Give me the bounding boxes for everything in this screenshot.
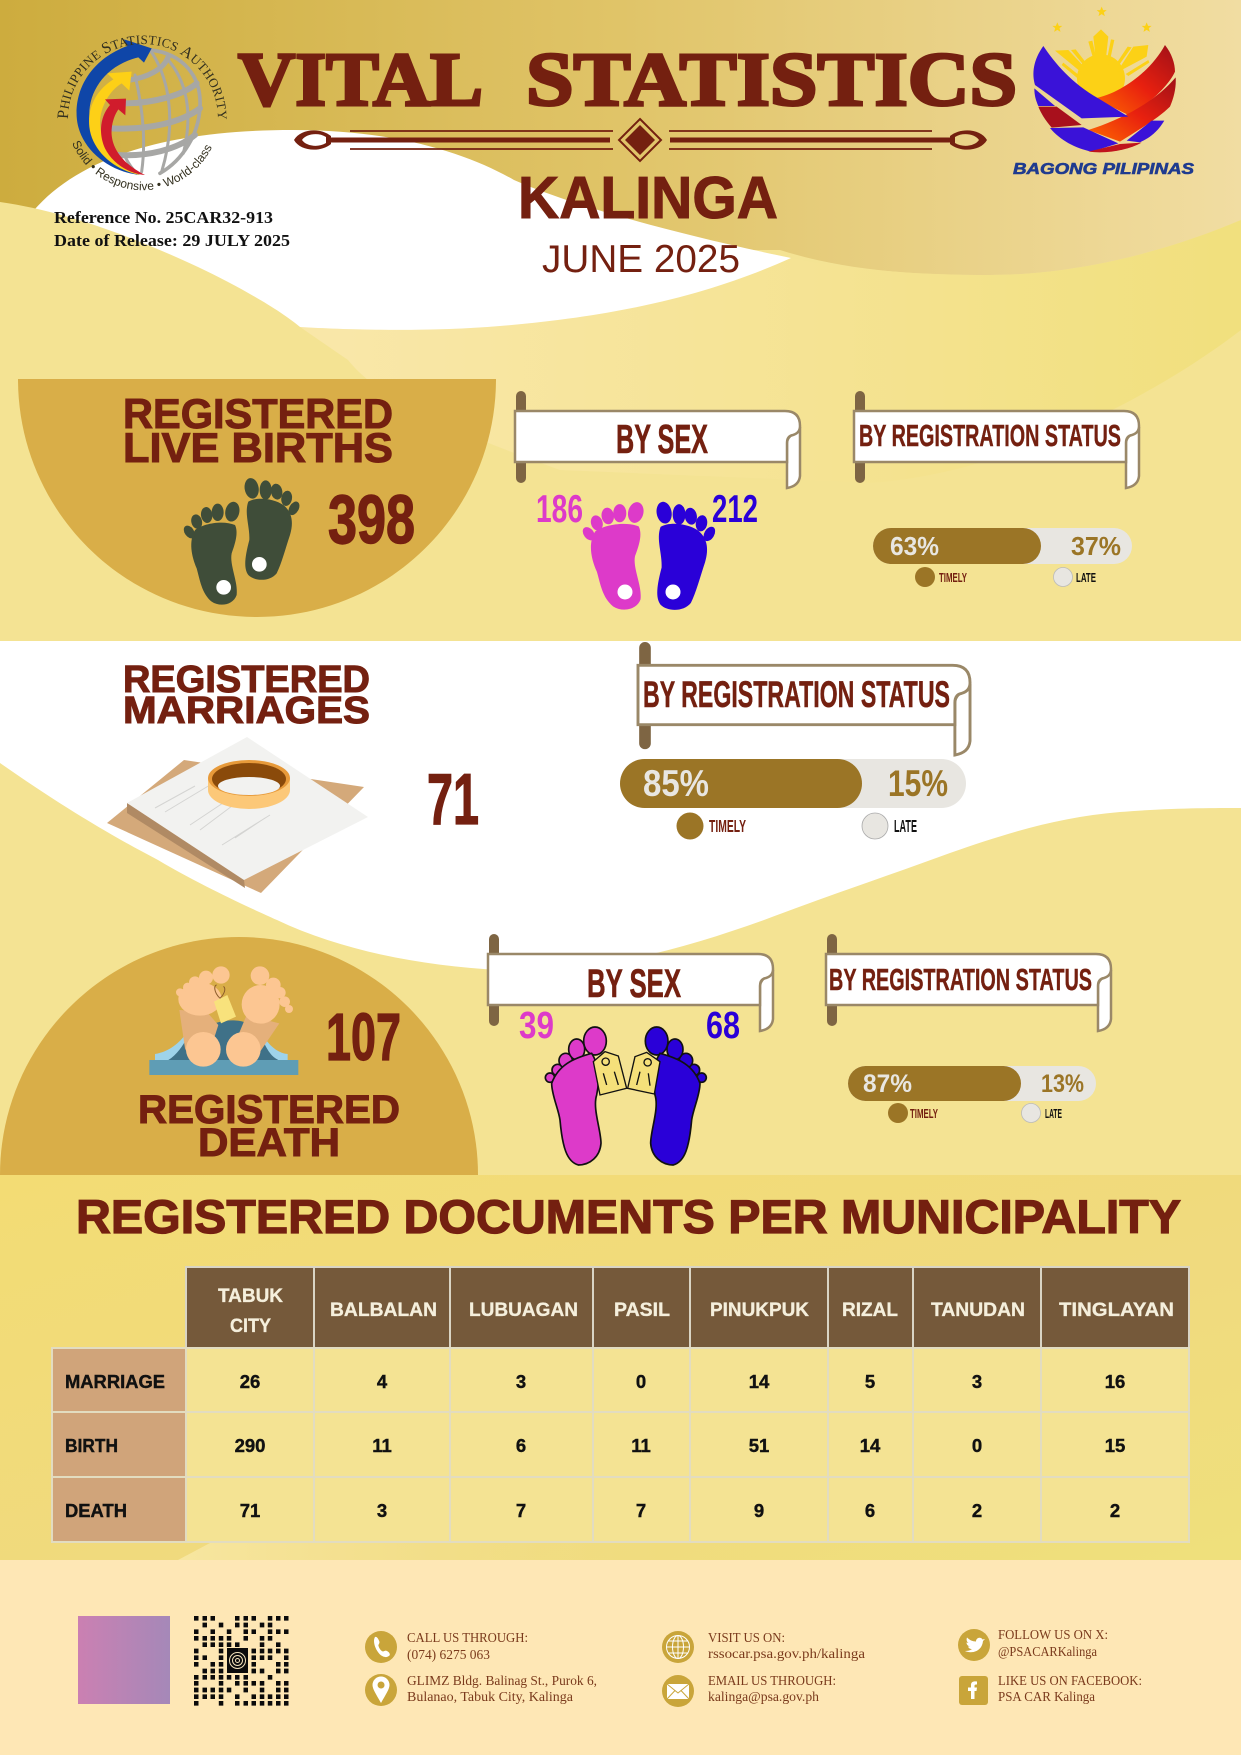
icon: facebook <box>959 1676 988 1705</box>
contact: email <box>708 1674 836 1705</box>
total: 398 <box>328 481 415 558</box>
contact: X account: FOLLOW US ON X: <box>998 1628 1108 1643</box>
table section background <box>0 1175 1241 1560</box>
progress bar: 63% <box>890 533 939 561</box>
title: STATISTICS <box>526 38 1017 122</box>
reference text: Date of Release: 29 JULY 2025 <box>54 231 290 250</box>
panel: registered death <box>0 937 478 1175</box>
banner label: BY REGISTRATION STATUS <box>643 674 950 715</box>
globe <box>112 50 200 173</box>
section heading: registered documents per municipality: REGISTERED DOCUMENTS PER MUNICIPALITY <box>76 1190 1181 1243</box>
banner <box>515 391 800 488</box>
legend: LATE <box>894 816 917 836</box>
title ornament <box>294 119 987 161</box>
progress bar <box>848 1066 1096 1101</box>
row: marriage: 26 <box>240 1371 260 1392</box>
reference text: Reference No. 25CAR32-913 <box>54 208 273 227</box>
banner label: BY SEX <box>616 416 708 462</box>
panel: marriages by registration status <box>620 642 970 840</box>
icon: phone <box>365 1631 397 1663</box>
icon: female foot <box>580 501 646 610</box>
table row label cells <box>52 1348 186 1542</box>
contact: facebook: PSA CAR Kalinga <box>998 1690 1096 1705</box>
panel: deaths by registration status <box>826 934 1111 1123</box>
row: birth: 14 <box>860 1435 881 1456</box>
gold dome <box>0 937 478 1175</box>
progress bar: 13% <box>1041 1070 1084 1098</box>
logo ring title: PHILIPPINE STATISTICS AUTHORITY <box>57 36 227 120</box>
red bands <box>1095 45 1175 115</box>
contact: address <box>407 1674 597 1705</box>
legend: LATE <box>1076 571 1096 585</box>
total: 107 <box>326 1000 401 1075</box>
progress bar: 87% <box>863 1070 912 1098</box>
sun <box>1055 29 1149 102</box>
legend: TIMELY <box>910 1107 938 1121</box>
panel: registered marriages <box>107 659 479 893</box>
lower yellow wave <box>0 763 1241 1175</box>
progress bar: 85% <box>643 763 709 804</box>
contact: phone: (074) 6275 063 <box>407 1648 490 1663</box>
municipality names: CITY <box>230 1316 271 1337</box>
row: marriage: 4 <box>377 1371 388 1392</box>
row: death <box>65 1500 1120 1521</box>
legend: TIMELY <box>709 816 746 836</box>
municipality names: PASIL <box>614 1300 670 1321</box>
municipality names: TANUDAN <box>931 1300 1025 1321</box>
row: marriage: MARRIAGE <box>65 1371 165 1392</box>
table section lower light band <box>178 1543 1241 1560</box>
logo ring motto: Solid • Responsive • World-class <box>73 140 212 190</box>
contact: phone <box>407 1631 528 1663</box>
municipality names: PINUKPUK <box>710 1300 809 1321</box>
stars <box>1052 7 1152 32</box>
row: marriage: 16 <box>1105 1371 1125 1392</box>
row: birth: 6 <box>516 1435 526 1456</box>
table header cells <box>186 1267 1189 1348</box>
row: marriage: 14 <box>749 1371 770 1392</box>
panel: deaths by sex <box>488 934 773 1165</box>
heading: REGISTERED <box>123 659 370 701</box>
PSA logo <box>57 36 227 190</box>
row: death: 6 <box>865 1500 875 1521</box>
banner label: BY SEX <box>587 962 681 1006</box>
row: death: 3 <box>377 1500 387 1521</box>
reference text <box>54 208 290 250</box>
row: marriage: 3 <box>972 1371 982 1392</box>
male count: 212 <box>712 488 758 531</box>
banner label: BY REGISTRATION STATUS <box>829 963 1092 997</box>
row: birth: 15 <box>1105 1435 1125 1456</box>
progress bar: 37% <box>1071 533 1121 561</box>
heading: REGISTERED <box>123 390 393 437</box>
row: marriage: 5 <box>865 1371 875 1392</box>
header gold wave <box>0 0 1241 275</box>
icon: ring on documents <box>107 737 368 893</box>
contact: phone: CALL US THROUGH: <box>407 1631 528 1646</box>
heading <box>123 390 393 471</box>
municipality names: LUBUAGAN <box>469 1300 578 1321</box>
contact: facebook: LIKE US ON FACEBOOK: <box>998 1674 1142 1689</box>
heading: DEATH <box>198 1121 340 1165</box>
municipality names: RIZAL <box>842 1300 898 1321</box>
row: marriage: 0 <box>636 1371 646 1392</box>
pink placeholder block <box>78 1616 170 1704</box>
row: death: DEATH <box>65 1500 127 1521</box>
panel: births by registration status <box>854 391 1139 587</box>
title: VITAL <box>238 38 483 122</box>
province heading: KALINGA <box>518 165 778 231</box>
row: marriage <box>65 1371 1125 1392</box>
municipality names <box>218 1286 1174 1337</box>
table body cells <box>186 1348 1189 1542</box>
row: birth: 11 <box>631 1435 651 1456</box>
banner <box>488 934 773 1031</box>
title <box>238 38 1017 122</box>
progress bar <box>620 759 966 808</box>
female count: 39 <box>519 1005 554 1047</box>
total: 71 <box>427 760 479 840</box>
Bagong Pilipinas logo <box>1013 7 1195 178</box>
contact: email: EMAIL US THROUGH: <box>708 1674 836 1689</box>
icon: male foot <box>655 501 718 610</box>
heading <box>123 659 370 732</box>
row: death: 7 <box>636 1500 646 1521</box>
panel: births by sex <box>515 391 800 610</box>
legend <box>888 1103 1062 1123</box>
icon: location pin <box>365 1674 397 1706</box>
contact: website: VISIT US ON: <box>708 1631 785 1646</box>
contact: X account <box>998 1628 1108 1660</box>
row: death: 2 <box>972 1500 982 1521</box>
municipality names: TINGLAYAN <box>1059 1300 1174 1321</box>
blue bands <box>1033 46 1128 118</box>
contact: facebook <box>998 1674 1142 1705</box>
footer <box>78 1616 1142 1707</box>
row: birth: 11 <box>372 1435 392 1456</box>
icon: feet with tags <box>545 1027 706 1165</box>
heading: LIVE BIRTHS <box>123 424 393 471</box>
legend <box>676 812 917 840</box>
row: birth: 290 <box>235 1435 265 1456</box>
logo caption: BAGONG PILIPINAS <box>1013 161 1195 178</box>
contact: X account: @PSACARKalinga <box>998 1645 1098 1660</box>
footer background <box>0 1560 1241 1755</box>
heading: MARRIAGES <box>123 690 370 732</box>
municipality names: BALBALAN <box>330 1300 437 1321</box>
page background <box>0 0 1241 1175</box>
row: death: 71 <box>240 1500 260 1521</box>
row: marriage: 3 <box>516 1371 526 1392</box>
arrows <box>77 39 152 175</box>
light yellow swoosh <box>300 220 1241 483</box>
row: birth: BIRTH <box>65 1435 118 1456</box>
banner <box>854 391 1139 488</box>
progress bar <box>873 528 1132 564</box>
row: death: 7 <box>516 1500 526 1521</box>
banner <box>638 642 970 755</box>
row: death: 9 <box>754 1500 764 1521</box>
female count: 186 <box>536 488 583 531</box>
progress bar: 15% <box>888 763 948 804</box>
header white wave <box>30 130 791 330</box>
row: birth: 51 <box>749 1435 769 1456</box>
legend: LATE <box>1045 1107 1062 1121</box>
icon: globe <box>662 1631 694 1663</box>
contact: address: GLIMZ Bldg. Balinag St., Purok 6, <box>407 1674 597 1689</box>
period: JUNE 2025 <box>542 238 740 281</box>
icon: feet with toe tag <box>149 966 298 1075</box>
heading: REGISTERED <box>138 1088 400 1132</box>
panel: registered live births <box>18 379 496 617</box>
icon: envelope <box>662 1675 694 1707</box>
male count: 68 <box>706 1005 740 1047</box>
row: birth: 0 <box>972 1435 982 1456</box>
left yellow wave <box>0 202 348 362</box>
QR code <box>194 1618 288 1703</box>
white band of marriages section <box>0 641 1241 981</box>
legend: TIMELY <box>939 571 967 585</box>
contact: email: kalinga@psa.gov.ph <box>708 1690 819 1705</box>
municipality names: TABUK <box>218 1286 283 1307</box>
row: birth <box>65 1435 1125 1456</box>
legend <box>915 567 1096 587</box>
icon: baby feet <box>181 477 302 605</box>
heading <box>138 1088 400 1165</box>
icon: twitter bird <box>958 1629 990 1661</box>
row: death: 2 <box>1110 1500 1120 1521</box>
contact: website: rssocar.psa.gov.ph/kalinga <box>708 1647 866 1662</box>
contact: address: Bulanao, Tabuk City, Kalinga <box>407 1690 574 1705</box>
municipality table <box>52 1267 1189 1542</box>
gold half circle <box>18 379 496 617</box>
banner <box>826 934 1111 1031</box>
contact: website <box>708 1631 866 1662</box>
